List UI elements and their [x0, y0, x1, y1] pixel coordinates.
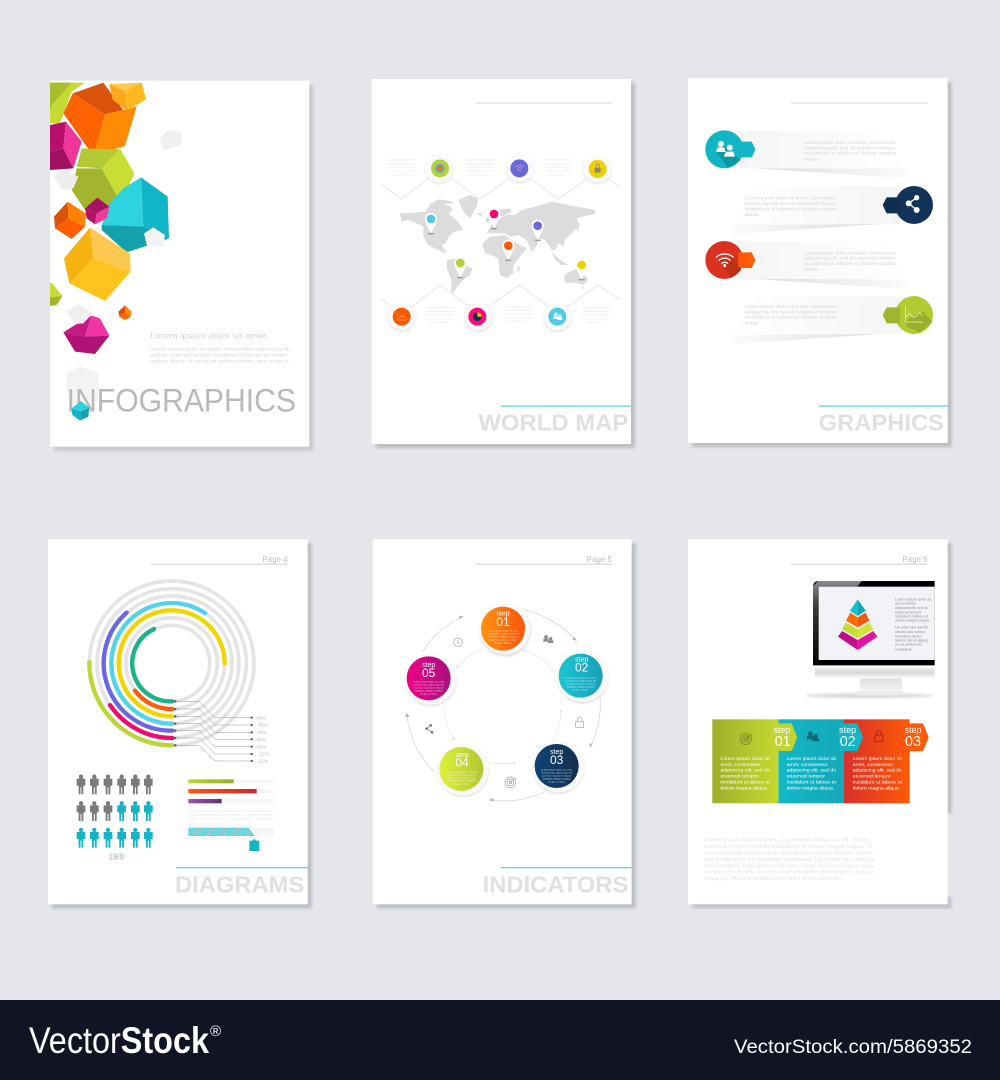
monitor text: ex ea commodo	[895, 643, 922, 647]
step 03 panel: amet, consectetur	[853, 762, 894, 767]
step 04: incididunt ut labore et dolore	[447, 779, 476, 782]
map caption blocks: incididunt ut labore	[388, 170, 417, 173]
row 4: chart: adipiscing elit, sed do eiusmod tempor	[745, 309, 837, 314]
map caption blocks: sed do eiusmod tempor	[388, 166, 416, 169]
step 04	[437, 744, 489, 797]
map caption blocks: sed do eiusmod tempor	[426, 314, 454, 317]
row 1: users: adipiscing elit, sed do eiusmod tempor	[804, 145, 897, 150]
step 03: incididunt ut labore et dolore	[543, 777, 571, 780]
map caption blocks: incididunt ut labore	[503, 316, 532, 319]
row 4: chart: incididunt ut labore et dolore magna	[745, 315, 837, 320]
page: infographics cover	[50, 81, 313, 451]
step icons	[426, 635, 584, 788]
row 3: wifi: adipiscing elit, sed do eiusmod tempor	[804, 256, 897, 261]
monitor text: exercitation ullamco	[895, 634, 922, 638]
step 05: sed do eiusmod tempor	[414, 687, 444, 690]
map caption blocks: Lorem ipsum dolor sit amet	[426, 306, 454, 309]
page: world map	[372, 79, 635, 448]
cover paragraph: sed do eiusmod tempor incididunt ut labore et dolore	[150, 352, 287, 357]
step 02: Lorem ipsum dolor sit amet	[565, 676, 597, 679]
footer logo: VectorStock	[29, 1020, 209, 1061]
step 03: Lorem ipsum dolor sit amet	[541, 768, 573, 771]
step 04: 04	[455, 756, 469, 770]
footer registered mark: ®	[210, 1023, 221, 1040]
body paragraph: Lorem ipsum dolor sit amet, consectetur adipiscing elit, sed do	[704, 838, 870, 844]
map caption blocks: consectetur adipiscing elit	[543, 162, 572, 165]
map caption blocks: Lorem ipsum dolor sit amet	[388, 159, 416, 162]
step 02 panel: adipiscing elit, sed do	[787, 768, 837, 773]
map caption blocks: magna aliqua	[392, 174, 411, 176]
map caption blocks: magna aliqua	[587, 322, 606, 324]
monitor text: Lorem ipsum dolor sit	[895, 597, 931, 601]
page: diagrams	[48, 539, 312, 908]
leader lines and percentages: 21%	[258, 759, 269, 765]
row 1: users	[705, 130, 907, 178]
row 3: wifi: aliqua.	[804, 267, 819, 272]
step 01: step	[496, 611, 510, 618]
step 01: 01	[496, 615, 510, 629]
step 01: incididunt ut labore et dolore	[489, 639, 518, 642]
step 01: Lorem ipsum dolor sit amet	[487, 630, 519, 633]
bars caption	[188, 810, 274, 821]
horizontal bars	[188, 779, 274, 803]
map caption blocks: magna aliqua	[470, 174, 489, 176]
step 04: step	[455, 752, 469, 759]
row 1: users: aliqua.	[804, 156, 819, 161]
monitor text: Ut enim ad minim	[895, 626, 928, 630]
step 05: consectetur adipiscing elit	[413, 684, 444, 687]
body paragraph: culpa qui officia deserunt mollit anim id est laborum.	[704, 876, 841, 882]
row 3: wifi	[705, 241, 907, 289]
step 03: magna aliqua	[548, 781, 566, 783]
step 01 panel: dolore magna aliqua.	[720, 786, 768, 791]
step 02 panel	[778, 719, 863, 803]
step 05: Lorem ipsum dolor sit amet	[413, 681, 445, 684]
step 03 panel: dolore magna aliqua.	[853, 786, 900, 791]
step 01 panel: amet, consectetur	[720, 762, 762, 767]
step 02	[557, 651, 608, 703]
step 02 panel: eiusmod tempor	[787, 774, 826, 779]
page number: Page 6	[902, 555, 928, 564]
cover paragraph	[150, 346, 292, 363]
people pictogram	[77, 774, 153, 848]
step 05: 05	[422, 666, 436, 680]
step 02: 02	[575, 661, 589, 675]
step 01 panel: 01	[775, 734, 791, 750]
leader lines and percentages: 75%	[257, 730, 268, 736]
map caption blocks: sed do eiusmod tempor	[466, 166, 495, 169]
step 02: magna aliqua	[572, 689, 590, 691]
step 03 panel: 03	[905, 734, 921, 750]
pyramid	[838, 599, 877, 650]
title: WORLD MAP: WORLD MAP	[478, 409, 628, 435]
cover paragraph: magna aliqua. Ut enim ad minim veniam, quis nostrud	[150, 358, 289, 363]
row 1: users: incididunt ut labore et dolore magna	[804, 151, 896, 156]
map caption blocks: magna aliqua	[430, 322, 449, 324]
cycle arrows	[406, 609, 600, 802]
step 02 panel: incididunt ut labore et	[787, 780, 837, 785]
step 02 panel: dolore magna aliqua.	[787, 786, 834, 791]
3D cubes cluster	[50, 83, 182, 403]
leader lines and percentages: 44%	[256, 737, 267, 743]
row 4: chart: Lorem ipsum dolor sit amet, consectetur	[745, 304, 837, 309]
title: DIAGRAMS: DIAGRAMS	[175, 871, 304, 897]
map caption blocks: Lorem ipsum dolor sit amet	[503, 305, 532, 308]
row 2: share: aliqua.	[745, 212, 759, 217]
step 03: consectetur adipiscing elit	[541, 771, 572, 774]
map caption blocks: sed do eiusmod tempor	[582, 314, 611, 317]
body paragraph: nisi ut aliquip ex ea commodo consequat. Duis aute irure dolor in	[704, 857, 875, 863]
step 02: step	[575, 657, 588, 664]
world map silhouette	[400, 195, 595, 293]
hatched progress bar with marker	[188, 828, 274, 851]
leader lines and percentages: 45%	[257, 715, 267, 721]
monitor text: adipiscing elit, sed do	[895, 606, 928, 610]
title: INFOGRAPHICS: INFOGRAPHICS	[67, 383, 296, 419]
body paragraph: enim ad minim veniam, quis nostrud exercitation ullamco laboris	[704, 851, 874, 857]
leader lines and percentages	[174, 700, 269, 765]
monitor text: eiusmod tempor	[895, 610, 922, 614]
step 01 panel: eiusmod tempor	[720, 774, 759, 779]
step 04: Lorem ipsum dolor sit amet	[446, 770, 477, 773]
page: indicators	[373, 539, 636, 908]
step 03: 03	[550, 753, 564, 767]
monitor text: laboris nisi ut aliquip	[895, 639, 928, 643]
zigzag connector lines	[382, 179, 620, 307]
monitor text: consequat.	[895, 647, 912, 651]
step 04: sed do eiusmod tempor	[447, 776, 476, 779]
step 04: consectetur adipiscing elit	[446, 773, 477, 776]
leader lines and percentages: 11%	[259, 752, 269, 758]
step 01 panel: Lorem ipsum dolor sit	[720, 756, 771, 761]
page: steps and monitor	[688, 539, 952, 908]
title: GRAPHICS: GRAPHICS	[819, 409, 944, 435]
subtitle: Lorem ipsum dolor sit amet	[150, 331, 267, 341]
page number: Page 5	[587, 555, 613, 564]
step 01	[480, 604, 531, 656]
row 2: share: incididunt ut labore et dolore magna	[745, 206, 837, 211]
body paragraph: pariatur. Excepteur sint occaecat cupidatat non proident, sunt in	[704, 870, 873, 876]
row 1: users: Lorem ipsum dolor sit amet, consectetur	[804, 140, 896, 145]
body paragraph	[704, 838, 875, 882]
row 2: share	[732, 186, 933, 234]
monitor text	[895, 597, 931, 651]
step 03 panel: step	[905, 725, 921, 735]
step 03 panel: adipiscing elit, sed do	[853, 768, 903, 773]
bars caption: sed do eiusmod tempor incididunt ut labore et dolore	[188, 814, 273, 817]
monitor text: amet, consectetur	[895, 602, 916, 606]
page: graphics	[688, 78, 952, 447]
step 01 panel	[712, 719, 797, 803]
small cyan cube	[72, 401, 89, 421]
map caption blocks: magna aliqua	[547, 174, 566, 176]
row 4: chart: aliqua.	[745, 320, 759, 325]
step 05: magna aliqua	[420, 694, 438, 696]
row 3: wifi: incididunt ut labore et dolore magna	[804, 261, 896, 266]
row 3: wifi: Lorem ipsum dolor sit amet, consectetur	[804, 250, 896, 255]
map caption blocks: sed do eiusmod tempor	[503, 313, 532, 316]
body paragraph: eiusmod tempor incididunt ut labore et dolore magna aliqua. Ut	[704, 844, 873, 850]
map caption blocks: consectetur adipiscing elit	[466, 162, 495, 165]
map pins	[425, 208, 588, 280]
step 04: magna aliqua	[453, 783, 470, 785]
step 03 panel: Lorem ipsum dolor sit	[853, 756, 903, 761]
map icon badges	[388, 154, 611, 332]
step 02 panel: amet, consectetur	[787, 762, 828, 767]
monitor text: dolore magna aliqua.	[895, 619, 930, 623]
step 03 panel	[844, 719, 929, 803]
map caption blocks: incididunt ut labore	[466, 170, 495, 173]
row 4: chart	[732, 296, 933, 344]
step 01 panel: step	[774, 725, 790, 735]
step 02 panel: step	[839, 725, 856, 735]
map caption blocks: Lorem ipsum dolor sit amet	[466, 159, 495, 162]
row 2: share: Lorem ipsum dolor sit amet, consectetur	[745, 196, 837, 201]
step 05	[405, 653, 456, 706]
title: INDICATORS: INDICATORS	[483, 871, 628, 897]
step 03: step	[550, 749, 563, 756]
monitor	[803, 581, 940, 698]
step 01: sed do eiusmod tempor	[488, 636, 518, 639]
map caption blocks: magna aliqua	[508, 321, 527, 323]
map caption blocks: Lorem ipsum dolor sit amet	[543, 159, 572, 162]
footer bar	[0, 1000, 1000, 1080]
step 05: incididunt ut labore et dolore	[415, 690, 443, 693]
step 03 panel: eiusmod tempor	[853, 774, 892, 779]
pictogram ratio: 18/9	[109, 853, 125, 862]
step 02 panel: Lorem ipsum dolor sit	[787, 756, 837, 761]
body paragraph: reprehenderit in voluptate velit esse cillum dolore eu fugiat nulla	[704, 863, 873, 869]
leader lines and percentages: 15%	[258, 723, 268, 729]
map caption blocks: Lorem ipsum dolor sit amet	[582, 306, 611, 309]
step 01: consectetur adipiscing elit	[488, 633, 519, 636]
map caption blocks: consectetur adipiscing elit	[388, 162, 416, 165]
step 02: sed do eiusmod tempor	[566, 682, 596, 685]
bars caption: magna aliqua. Ut enim ad minim veniam, quis nostrud	[188, 818, 274, 821]
step 02: incididunt ut labore et dolore	[567, 685, 595, 688]
step 05: step	[422, 662, 435, 669]
page number: Page 4	[262, 555, 288, 564]
step 01 panel: adipiscing elit, sed do	[720, 768, 770, 773]
step 03	[533, 741, 584, 794]
step 03: sed do eiusmod tempor	[542, 774, 572, 777]
map caption blocks: incididunt ut labore	[582, 317, 611, 320]
map caption blocks: consectetur adipiscing elit	[426, 310, 454, 313]
map caption blocks: consectetur adipiscing elit	[582, 310, 611, 313]
leader lines and percentages: 62%	[257, 744, 267, 750]
radial progress chart	[89, 581, 254, 746]
monitor text: veniam, quis nostrud	[895, 630, 925, 634]
map caption blocks	[388, 159, 611, 324]
monitor text: incididunt ut labore et	[895, 614, 928, 618]
map caption blocks: sed do eiusmod tempor	[543, 166, 572, 169]
map caption blocks: incididunt ut labore	[543, 170, 572, 173]
step 03 panel: incididunt ut labore et	[853, 780, 903, 785]
bars caption: Lorem ipsum dolor sit amet, consectetur adipiscing elit	[188, 810, 274, 813]
row 2: share: adipiscing elit, sed do eiusmod tempor	[745, 201, 837, 206]
footer image id: VectorStock.com/5869352	[734, 1036, 972, 1058]
step 01: magna aliqua	[495, 643, 512, 645]
cover paragraph: Lorem ipsum dolor sit amet, consectetur adipiscing elit,	[150, 346, 292, 351]
map caption blocks: incididunt ut labore	[426, 317, 455, 320]
map caption blocks: consectetur adipiscing elit	[503, 309, 532, 312]
step 02: consectetur adipiscing elit	[565, 679, 596, 682]
step 02 panel: 02	[840, 734, 856, 750]
step 01 panel: incididunt ut labore et	[720, 780, 771, 785]
